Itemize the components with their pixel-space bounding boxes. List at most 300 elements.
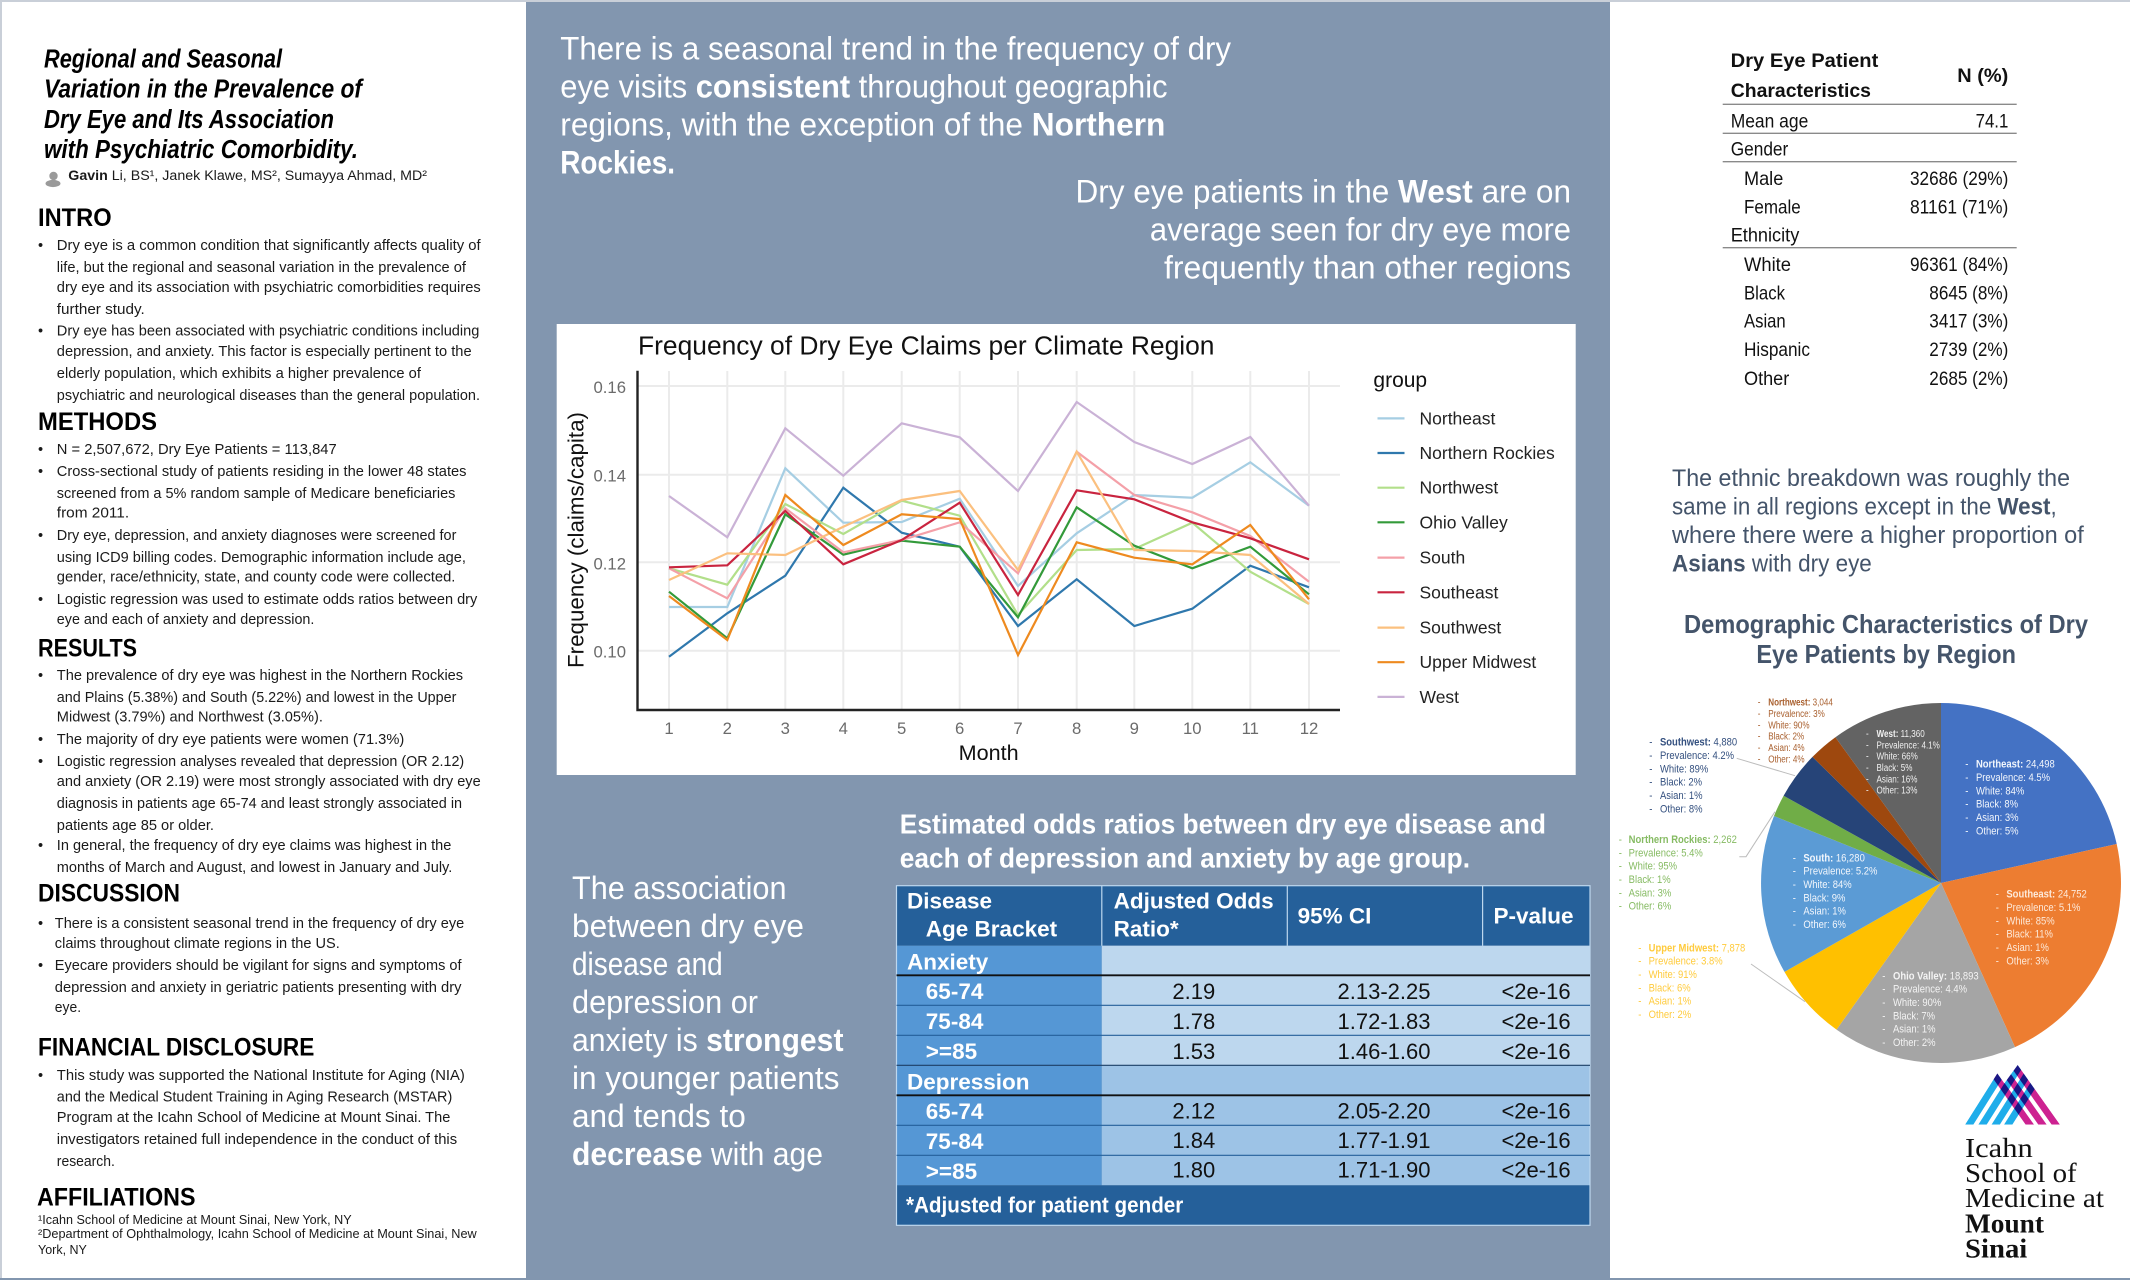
x axis ticks: 1 <box>664 719 674 738</box>
x axis ticks: 4 <box>839 719 848 738</box>
text block: discussion <box>38 916 464 1016</box>
text block: results: Logistic regression analyses revealed that depression (OR 2.12) <box>57 754 464 770</box>
logo wordmark <box>1965 1133 2105 1263</box>
logo wordmark: Sinai <box>1965 1233 2028 1263</box>
pie label: upper midwest: - <box>1638 956 1641 968</box>
pie label: northern rockies: 2,262 <box>1713 834 1737 846</box>
pie label: ohio valley: - <box>1882 997 1885 1009</box>
text block: results <box>38 668 481 876</box>
heading: demographic pie chart <box>1684 609 2088 669</box>
text block: intro: elderly population, which exhibits a higher prevalence of <box>57 366 422 382</box>
text block: results: The prevalence of dry eye was highest in the Northern Rockies <box>57 668 463 684</box>
text block: intro: Dry eye is a common condition that significantly affects quality of <box>57 238 482 254</box>
characteristics rows: 96361 (84%) <box>1910 254 2008 276</box>
heading: demographic pie chart: Eye Patients by Region <box>1756 639 2016 669</box>
text block: results: patients age 85 or older. <box>57 818 214 834</box>
pie label: northeast: - <box>1965 812 1968 824</box>
pie label: southeast: Black: 11% <box>2006 929 2053 941</box>
pie label: upper midwest: - <box>1638 943 1641 955</box>
y axis ticks: 0.12 <box>594 554 626 573</box>
pie label: southwest: Southwest: <box>1660 737 1711 749</box>
table: odds ratios <box>896 886 1590 1225</box>
logo: Icahn School of Medicine at Mount Sinai <box>1965 1060 2105 1263</box>
pie label: upper midwest: Black: 6% <box>1649 983 1691 995</box>
text block: intro: psychiatric and neurological diseases than the general population. <box>57 388 480 404</box>
pie label: northeast: - <box>1965 826 1968 838</box>
text block: results: The majority of dry eye patients were women (71.3%) <box>57 732 404 748</box>
pie label: southeast: Southeast: <box>2006 889 2055 901</box>
chart legend: Northeast <box>1420 408 1496 428</box>
row labels: 75-84 <box>926 1129 984 1154</box>
table values: 2.12 <box>1172 1099 1215 1124</box>
pie label: northern rockies: Asian: 3% <box>1629 888 1671 900</box>
chart legend <box>1373 369 1555 707</box>
callout: association with age: anxiety is strongest <box>572 1022 844 1058</box>
title: Dry Eye and Its Association <box>44 106 334 134</box>
pie label: west: Black: 5% <box>1877 762 1912 773</box>
table values: 1.78 <box>1172 1009 1215 1034</box>
table values <box>1172 979 1571 1183</box>
text block: financial disclosure: investigators retained full independence in the conduct of this <box>57 1132 457 1148</box>
pie label: west: Other: 13% <box>1877 785 1917 796</box>
characteristics rows: Mean age <box>1731 110 1808 132</box>
pie label: upper midwest: White: 91% <box>1649 969 1697 981</box>
chart legend: Upper Midwest <box>1420 652 1536 672</box>
pie label: northeast <box>1965 759 2055 838</box>
title: Variation in the Prevalence of <box>44 76 364 104</box>
pie label: northwest: - <box>1758 708 1760 719</box>
pie label: southwest: - <box>1649 804 1652 816</box>
pie label: south: South: <box>1803 853 1833 865</box>
pie label: west: - <box>1866 751 1869 762</box>
pie label: northeast: - <box>1965 772 1968 784</box>
pie label: ohio valley: - <box>1882 1024 1885 1036</box>
characteristics rows: 2739 (2%) <box>1929 339 2008 361</box>
pie label: southeast <box>1996 889 2087 968</box>
authors: Gavin Li, BS¹, Janek Klawe, MS², Sumayya Ahmad, MD² <box>68 168 428 183</box>
pie label: southeast: - <box>1996 956 1999 968</box>
table footnote: *Adjusted for patient gender <box>906 1193 1184 1218</box>
text block: methods: N = 2,507,672, Dry Eye Patients = 113,847 <box>57 442 337 458</box>
pie label: south: - <box>1793 879 1796 891</box>
chart legend: Ohio Valley <box>1420 512 1508 532</box>
pie label: ohio valley: - <box>1882 1011 1885 1023</box>
series lines <box>669 402 1309 657</box>
pie label: southwest: - <box>1649 750 1652 762</box>
pie label: northeast: Black: 8% <box>1976 799 2018 811</box>
text block: methods: screened from a 5% random sample of Medicare beneficiaries <box>57 486 455 502</box>
pie label: ohio valley <box>1882 971 1979 1049</box>
pie label: southwest: Black: 2% <box>1660 777 1702 789</box>
pie label: west: White: 66% <box>1877 751 1918 762</box>
pie label: northwest: 3,044 <box>1813 697 1833 708</box>
table values: 1.46-1.60 <box>1338 1039 1430 1064</box>
chart legend: South <box>1420 548 1465 568</box>
characteristics rows: Male <box>1744 168 1783 190</box>
chart title: Frequency of Dry Eye Claims per Climate Region <box>638 332 1214 360</box>
text block: financial disclosure: Program at the Icahn School of Medicine at Mount Sinai. The <box>57 1110 450 1126</box>
y axis ticks: 0.16 <box>594 378 626 397</box>
pie label: ohio valley: - <box>1882 984 1885 996</box>
pie label: ohio valley: Prevalence: 4.4% <box>1893 984 1967 996</box>
table header <box>907 888 1574 942</box>
row labels: Anxiety <box>907 949 989 974</box>
x axis ticks: 6 <box>955 719 964 738</box>
table header: Adjusted Odds <box>1114 888 1274 913</box>
text block: results: • <box>38 838 43 854</box>
x axis ticks: 12 <box>1300 719 1318 738</box>
text block: methods: using ICD9 billing codes. Demographic information include age, <box>57 550 466 566</box>
callout: seasonal trend: There is a seasonal trend in the frequency of dry <box>560 30 1231 66</box>
text block: results: • <box>38 732 43 748</box>
row labels: 65-74 <box>926 1099 984 1124</box>
pie label: northeast: White: 84% <box>1976 786 2024 798</box>
text block: methods: • <box>38 592 43 608</box>
pie label: upper midwest <box>1638 943 1746 1021</box>
text block: discussion: • <box>38 916 43 932</box>
text block: intro: life, but the regional and seasonal variation in the prevalence of <box>57 260 467 276</box>
pie label: northwest: Prevalence: 3% <box>1768 708 1825 719</box>
pie label: northeast: Prevalence: 4.5% <box>1976 772 2050 784</box>
table values: 2.13-2.25 <box>1338 979 1430 1004</box>
text block: methods: Cross-sectional study of patients residing in the lower 48 states <box>57 464 467 480</box>
heading: intro: INTRO <box>38 204 112 232</box>
pie label: northern rockies <box>1619 834 1737 913</box>
chart axes <box>638 371 1340 710</box>
pie label: west: Prevalence: 4.1% <box>1877 740 1940 750</box>
pie label: northern rockies: Black: 1% <box>1629 874 1671 886</box>
pie label: south: White: 84% <box>1803 879 1852 891</box>
x axis ticks: 2 <box>723 719 732 738</box>
pie label: southeast: - <box>1996 929 1999 941</box>
pie label: southwest: White: 89% <box>1660 764 1708 776</box>
text block: financial disclosure: and the Medical Student Training in Aging Research (MSTAR) <box>57 1090 452 1106</box>
table values: 1.71-1.90 <box>1338 1158 1430 1183</box>
x axis ticks: 7 <box>1013 719 1023 738</box>
characteristics rows: 81161 (71%) <box>1910 196 2008 218</box>
icon: person <box>46 172 60 187</box>
pie label: southeast: Asian: 1% <box>2006 942 2049 954</box>
pie label: west: West: <box>1877 728 1898 739</box>
pie label: south: - <box>1793 866 1796 878</box>
text block: discussion: depression and anxiety in geriatric patients presenting with dry <box>55 980 462 996</box>
pie label: southwest: Other: 8% <box>1660 804 1703 816</box>
heading: financial disclosure: FINANCIAL DISCLOSURE <box>38 1034 314 1062</box>
line chart: frequency of claims per climate region <box>557 324 1576 775</box>
title: Regional and Seasonal <box>44 45 283 73</box>
table values: <2e-16 <box>1501 1009 1571 1034</box>
pie label: northwest: - <box>1758 697 1760 708</box>
pie label: southeast: - <box>1996 889 1999 901</box>
x axis title: Month <box>959 740 1019 765</box>
text block: results: • <box>38 668 43 684</box>
x axis ticks: 10 <box>1183 719 1202 738</box>
pie label: ohio valley: Ohio Valley: <box>1893 971 1947 983</box>
pie label: northwest: Other: 4% <box>1768 754 1805 765</box>
row labels: 65-74 <box>926 979 984 1004</box>
table header: 95% CI <box>1298 903 1371 928</box>
heading: demographic pie chart: Demographic Characteristics of Dry <box>1684 609 2088 639</box>
pie label: northeast: Asian: 3% <box>1976 812 2019 824</box>
text block: intro <box>38 238 482 404</box>
characteristics rows: Asian <box>1744 311 1786 333</box>
callout: ethnic breakdown: Asians with dry eye <box>1672 550 1872 578</box>
heading: discussion: DISCUSSION <box>38 880 180 908</box>
characteristics rows: 8645 (8%) <box>1929 282 2008 304</box>
characteristics header: Dry Eye Patient <box>1731 50 1879 72</box>
table header: P-value <box>1494 903 1574 928</box>
callout: seasonal trend: eye visits consistent throughout geographic <box>560 69 1168 105</box>
characteristics rows: 74.1 <box>1976 110 2008 132</box>
title <box>44 45 364 164</box>
row labels: Depression <box>907 1069 1030 1094</box>
title: with Psychiatric Comorbidity. <box>44 136 358 164</box>
pie label: northern rockies: - <box>1619 834 1622 846</box>
y axis title: Frequency (claims/capita) <box>564 412 588 668</box>
pie label: northeast: - <box>1965 786 1968 798</box>
table values: 1.77-1.91 <box>1338 1128 1430 1153</box>
text block: discussion: • <box>38 958 43 974</box>
table values: 1.72-1.83 <box>1338 1009 1430 1034</box>
characteristics rows: Other <box>1744 368 1790 390</box>
characteristics rows: Black <box>1744 282 1785 304</box>
pie label: southwest: - <box>1649 737 1652 749</box>
logo wordmark: Medicine at <box>1965 1183 2105 1213</box>
chart legend: Southwest <box>1420 618 1501 638</box>
x axis ticks: 9 <box>1130 719 1139 738</box>
logo wordmark: Icahn <box>1965 1133 2033 1163</box>
x axis ticks: 5 <box>897 719 906 738</box>
callout: west region <box>1076 174 1571 286</box>
chart legend: West <box>1420 687 1459 707</box>
pie label: south: - <box>1793 893 1796 905</box>
callout: association with age: disease and <box>572 946 723 982</box>
pie label: southwest: - <box>1649 764 1652 776</box>
pie label: upper midwest: Prevalence: 3.8% <box>1649 956 1723 968</box>
chart legend: Southeast <box>1420 582 1498 602</box>
characteristics header: N (%) <box>1957 65 2008 87</box>
x axis ticks: 8 <box>1072 719 1081 738</box>
x axis ticks <box>664 719 1318 738</box>
pie label: southeast: White: 85% <box>2006 916 2055 928</box>
pie label: south <box>1793 853 1877 931</box>
panel: left text column <box>37 45 482 1257</box>
callout: west region: frequently than other regions <box>1164 250 1571 286</box>
text block: intro: • <box>38 238 43 254</box>
text block: results: and Plains (5.38%) and South (5.22%) and lowest in the Upper <box>57 690 457 706</box>
pie label: west: - <box>1866 740 1869 750</box>
pie label: ohio valley: Black: 7% <box>1893 1011 1935 1023</box>
row labels: 75-84 <box>926 1009 984 1034</box>
pie label: upper midwest: - <box>1638 1009 1641 1021</box>
text block: results: Midwest (3.79%) and Northwest (3.05%). <box>57 710 323 726</box>
pie label: west: 11,360 <box>1901 728 1925 739</box>
pie label: south: Prevalence: 5.2% <box>1803 866 1877 878</box>
pie label: southeast: 24,752 <box>2058 889 2087 901</box>
table values: <2e-16 <box>1501 1039 1571 1064</box>
pie label: northwest: White: 90% <box>1768 720 1810 731</box>
pie label: northwest: - <box>1758 754 1760 765</box>
chart legend: Northwest <box>1420 478 1498 498</box>
callout: association with age: and tends to <box>572 1098 746 1134</box>
characteristics rows: Hispanic <box>1744 339 1810 361</box>
heading: results: RESULTS <box>38 634 137 662</box>
pie label: west: - <box>1866 762 1869 773</box>
pie label: south: Asian: 1% <box>1803 906 1846 918</box>
characteristics rows: 32686 (29%) <box>1910 168 2008 190</box>
callout: seasonal trend <box>560 30 1231 180</box>
pie label: ohio valley: 18,893 <box>1950 971 1979 983</box>
text block: intro: depression, and anxiety. This factor is especially pertinent to the <box>57 344 472 360</box>
text block: financial disclosure <box>38 1068 465 1170</box>
text block: methods <box>38 442 478 628</box>
text block: results: and anxiety (OR 2.19) were most strongly associated with dry eye <box>57 774 481 790</box>
text block: methods: • <box>38 528 43 544</box>
pie label: northwest: Black: 2% <box>1768 731 1804 742</box>
pie label: northwest <box>1758 697 1833 765</box>
heading: methods: METHODS <box>38 408 157 436</box>
text block: intro: further study. <box>57 302 145 318</box>
pie label: northwest: Asian: 4% <box>1768 742 1805 753</box>
callout: association with age: in younger patients <box>572 1060 840 1096</box>
pie label: south: - <box>1793 906 1796 918</box>
pie label: southeast: - <box>1996 916 1999 928</box>
pie label: south: - <box>1793 853 1796 865</box>
pie label: northern rockies: - <box>1619 888 1622 900</box>
characteristics rows <box>1731 110 2008 390</box>
row labels: >=85 <box>926 1159 977 1184</box>
pie label: northeast: Other: 5% <box>1976 826 2019 838</box>
pie label: upper midwest: - <box>1638 983 1641 995</box>
pie label: northern rockies: White: 95% <box>1629 861 1677 873</box>
pie label: upper midwest: - <box>1638 996 1641 1008</box>
pie label: northeast: - <box>1965 759 1968 771</box>
text block: discussion: eye. <box>55 1000 81 1016</box>
text block: results: • <box>38 754 43 770</box>
table values: <2e-16 <box>1501 1128 1571 1153</box>
callout: association with age: between dry eye <box>572 908 804 944</box>
row labels: >=85 <box>926 1039 977 1064</box>
text block: methods: Dry eye, depression, and anxiety diagnoses were screened for <box>57 528 457 544</box>
pie label: northwest: - <box>1758 720 1760 731</box>
callout: ethnic breakdown <box>1671 465 2084 578</box>
heading: odds ratio table: Estimated odds ratios between dry eye disease and <box>900 808 1546 839</box>
text block: methods: eye and each of anxiety and depression. <box>57 612 314 628</box>
pie label: upper midwest: Asian: 1% <box>1649 996 1691 1008</box>
pie label: northern rockies: Northern Rockies: <box>1629 834 1711 846</box>
table header: Age Bracket <box>926 917 1058 942</box>
text block: discussion: There is a consistent seasonal trend in the frequency of dry eye <box>55 916 464 932</box>
text block: methods: from 2011. <box>57 506 129 522</box>
pie label: south: Black: 9% <box>1803 893 1845 905</box>
text block: discussion: Eyecare providers should be vigilant for signs and symptoms of <box>55 958 462 974</box>
text block: affiliations <box>38 1212 477 1257</box>
text block: financial disclosure: • <box>38 1068 43 1084</box>
table: dry eye patient characteristics <box>1723 50 2017 390</box>
pie label: west: Asian: 16% <box>1877 774 1917 784</box>
x axis ticks: 3 <box>781 719 790 738</box>
callout: ethnic breakdown: where there were a higher proportion of <box>1671 522 2084 549</box>
pie label: upper midwest: Other: 2% <box>1649 1009 1691 1021</box>
pie label: southwest: Asian: 1% <box>1660 790 1703 802</box>
heading: affiliations: AFFILIATIONS <box>37 1183 196 1211</box>
table header: Ratio* <box>1114 917 1179 942</box>
table values: <2e-16 <box>1501 979 1571 1004</box>
table header: Disease <box>907 888 992 913</box>
pie label: ohio valley: Other: 2% <box>1893 1037 1936 1049</box>
pie label: northwest: - <box>1758 742 1760 753</box>
heading: odds ratio table: each of depression and anxiety by age group. <box>900 842 1470 873</box>
table values: <2e-16 <box>1501 1099 1571 1124</box>
pie label: northern rockies: Prevalence: 5.4% <box>1629 848 1703 860</box>
characteristics rows: 3417 (3%) <box>1929 311 2008 333</box>
pie label: southeast: Other: 3% <box>2006 956 2049 968</box>
callout: west region: average seen for dry eye more <box>1150 212 1571 248</box>
characteristics header: Characteristics <box>1731 80 1871 102</box>
panel: blue centre background <box>526 2 1610 1278</box>
callout: seasonal trend: Rockies. <box>560 144 675 180</box>
pie label: northeast: - <box>1965 799 1968 811</box>
pie label: southeast: - <box>1996 902 1999 914</box>
text block: financial disclosure: research. <box>57 1154 115 1170</box>
text block: methods: • <box>38 464 43 480</box>
pie label: northern rockies: Other: 6% <box>1629 901 1671 913</box>
text block: methods: Logistic regression was used to estimate odds ratios between dry <box>57 592 478 608</box>
x axis ticks: 11 <box>1242 719 1259 738</box>
chart legend: group <box>1373 369 1427 392</box>
pie label: upper midwest: Upper Midwest: <box>1649 943 1719 955</box>
characteristics rows: Female <box>1744 196 1801 218</box>
text block: affiliations: York, NY <box>38 1242 87 1257</box>
table values: 1.53 <box>1172 1039 1215 1064</box>
text block: intro: dry eye and its association with psychiatric comorbidities requires <box>57 280 481 296</box>
logo wordmark: School of <box>1965 1158 2077 1188</box>
logo wordmark: Mount <box>1965 1209 2044 1239</box>
y axis ticks: 0.10 <box>594 643 626 662</box>
characteristics rows: Ethnicity <box>1731 225 1800 247</box>
text block: results: months of March and August, and lowest in January and July. <box>57 860 452 876</box>
table values: 2.05-2.20 <box>1338 1099 1430 1124</box>
pie label: southeast: Prevalence: 5.1% <box>2006 902 2080 914</box>
pie label: upper midwest: 7,878 <box>1722 943 1745 955</box>
pie label: ohio valley: - <box>1882 971 1885 983</box>
text block: results: diagnosis in patients age 65-74 and least strongly associated in <box>57 796 462 812</box>
pie label: northern rockies: - <box>1619 848 1622 860</box>
text block: results: In general, the frequency of dry eye claims was highest in the <box>57 838 451 854</box>
text block: intro: • <box>38 324 43 340</box>
pie label: northern rockies: - <box>1619 861 1622 873</box>
text block: methods: • <box>38 442 43 458</box>
table values: 1.84 <box>1172 1128 1215 1153</box>
pie label: southwest <box>1649 737 1737 816</box>
y axis ticks: 0.14 <box>594 467 626 486</box>
pie label: ohio valley: White: 90% <box>1893 997 1941 1009</box>
pie label: south: Other: 6% <box>1803 919 1846 931</box>
pie label: northeast: 24,498 <box>2026 759 2055 771</box>
pie label: northwest: - <box>1758 731 1760 742</box>
characteristics rows: White <box>1744 254 1791 276</box>
pie label: ohio valley: - <box>1882 1037 1885 1049</box>
table values: <2e-16 <box>1501 1158 1571 1183</box>
pie label: south: - <box>1793 919 1796 931</box>
pie label: south: 16,280 <box>1836 853 1865 865</box>
pie label: west: - <box>1866 785 1869 796</box>
y axis ticks <box>594 378 626 662</box>
callout: association with age: The association <box>572 870 786 906</box>
text block: affiliations: ²Department of Ophthalmology, Icahn School of Medicine at Mount Sinai, New <box>38 1226 477 1241</box>
heading: odds ratio table <box>900 808 1546 873</box>
callout: seasonal trend: regions, with the exception of the Northern <box>560 107 1165 143</box>
